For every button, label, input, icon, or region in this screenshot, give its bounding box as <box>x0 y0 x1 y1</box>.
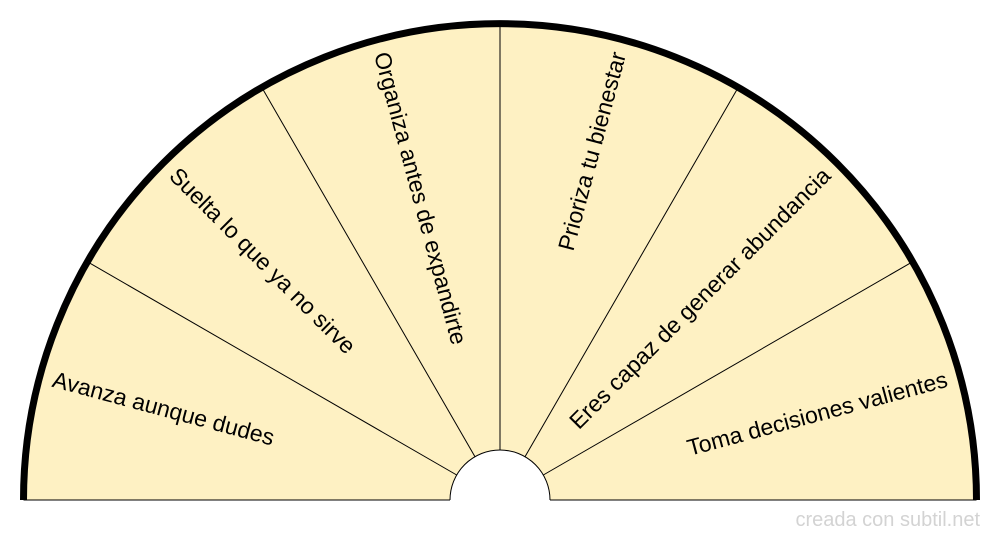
label: Suelta lo que ya no sirve: Suelta lo que ya no sirve <box>164 162 361 359</box>
label: Eres capaz de generar abundancia: Eres capaz de generar abundancia <box>564 162 836 434</box>
label: Prioriza tu bienestar: Prioriza tu bienestar <box>553 49 631 253</box>
label: Organiza antes de expandirte: Organiza antes de expandirte <box>369 49 472 347</box>
label: Avanza aunque dudes: Avanza aunque dudes <box>50 366 277 450</box>
label: Toma decisiones valientes: Toma decisiones valientes <box>684 366 950 461</box>
watermark: creada con subtil.net <box>795 509 980 531</box>
